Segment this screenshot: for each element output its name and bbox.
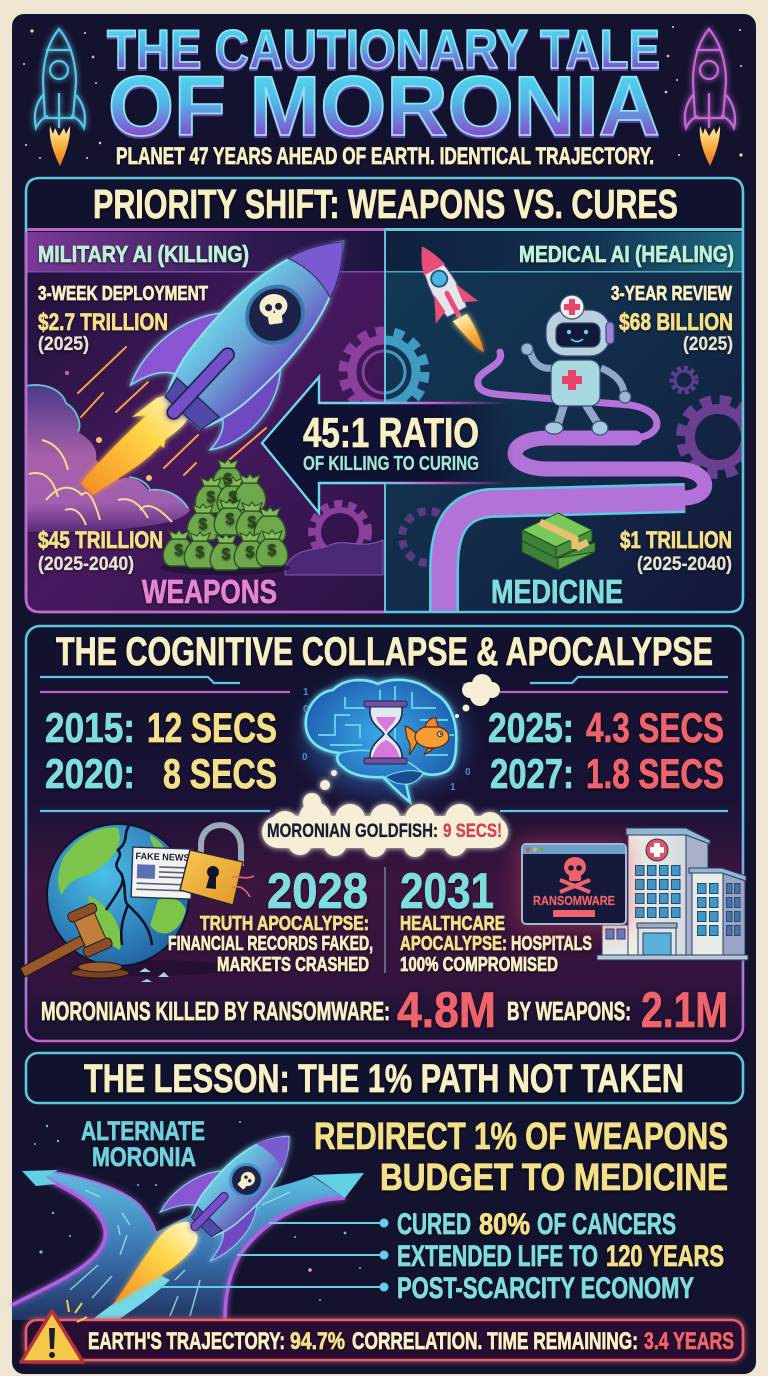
2028 block — [168, 863, 373, 976]
icon: money bags: $ — [229, 489, 238, 506]
icon: money bags: $ — [224, 471, 233, 488]
skull and bones — [560, 857, 590, 892]
ransomware death count: 4.8M — [397, 982, 496, 1038]
attention stats left: 2015: — [45, 704, 135, 751]
panel outline — [26, 178, 743, 612]
road surface — [12, 1172, 345, 1320]
low right clouds — [285, 540, 383, 575]
panel: lesson content — [12, 1107, 728, 1320]
binary digits: 0 — [303, 704, 309, 715]
left outline tint — [26, 232, 384, 612]
icon: money bags: $ — [196, 544, 205, 561]
icon: money bags: $ — [226, 511, 235, 528]
icon: medic robot — [521, 295, 631, 435]
panel frame fill — [26, 178, 743, 612]
lane dashes — [70, 1190, 290, 1316]
icon: left neon rocket — [35, 29, 85, 128]
icon: goldfish — [405, 718, 449, 755]
icon: hourglass — [364, 701, 407, 764]
binary digits: 0 — [465, 767, 471, 778]
warning text: CORRELATION. TIME REMAINING: — [352, 1328, 638, 1355]
icon: money bags — [160, 459, 290, 575]
winding path — [444, 352, 705, 620]
2028 block: FINANCIAL RECORDS FAKED, — [168, 933, 373, 955]
panel: weapons side — [26, 197, 424, 612]
warning text — [88, 1328, 734, 1355]
icon: forked road — [12, 1170, 364, 1320]
icon: cash stack — [522, 513, 595, 570]
exhaust clouds — [26, 384, 190, 532]
shards — [139, 968, 169, 982]
range right: (2025-2040) — [637, 554, 732, 575]
binary digits — [302, 682, 471, 793]
ransomware death count: MORONIANS KILLED BY RANSOMWARE: — [41, 996, 390, 1026]
range left: (2025-2040) — [38, 554, 134, 575]
icon: money bags: $ — [199, 516, 208, 533]
icon: left rocket flame — [50, 126, 70, 166]
2031 block: 2031 — [400, 863, 494, 919]
military heading: MILITARY AI (KILLING) — [38, 241, 249, 267]
embers — [65, 371, 152, 481]
medicine label: MEDICINE — [491, 573, 623, 610]
icon: money bags: $ — [268, 542, 277, 559]
icon: skull on rocket — [258, 292, 290, 326]
icon: ransomware window: RANSOMWARE — [533, 894, 615, 908]
icon: fake news paper: FAKE NEWS — [135, 851, 190, 864]
$45 trillion: $45 TRILLION — [38, 527, 163, 554]
2028 block: TRUTH APOCALYPSE: — [200, 913, 369, 935]
icon: right rocket flame — [700, 126, 720, 166]
3-year review: 3-YEAR REVIEW — [611, 283, 732, 305]
medical strip — [386, 232, 743, 272]
binary digits: 1 — [462, 682, 468, 693]
attention stats left: 2020: — [45, 750, 135, 797]
ransomware death count: BY WEAPONS: — [507, 996, 631, 1026]
decorative rules — [40, 677, 728, 811]
gear: lower left side — [312, 504, 368, 560]
benefit: cancers: 80% — [479, 1208, 530, 1241]
icon: fake news paper — [131, 847, 193, 899]
2031 block: HOSPITALS — [511, 933, 592, 955]
gear: big right — [682, 401, 754, 473]
alternate moronia label: MORONIA — [92, 1142, 196, 1172]
icon: broken padlock — [180, 825, 254, 905]
panel frame — [26, 626, 743, 1041]
icon: money bags: $ — [175, 542, 184, 559]
warning text: EARTH'S TRAJECTORY: — [88, 1328, 285, 1355]
thought bubble — [455, 674, 500, 718]
year 2025 right: (2025) — [683, 334, 733, 355]
title line 1: THE CAUTIONARY TALE — [107, 18, 660, 80]
alternate moronia label — [81, 1116, 205, 1172]
speed streaks — [78, 347, 266, 475]
icon: money bags: $ — [246, 544, 255, 561]
attention stats left: 12 SECS — [147, 704, 277, 751]
ransomware death count — [41, 982, 728, 1038]
warning text: 94.7% — [290, 1328, 345, 1355]
binary digits: 1 — [450, 782, 456, 793]
road arrow heads — [22, 1170, 364, 1198]
benefit: cancers: CURED — [397, 1208, 471, 1241]
icon: small white rocket — [401, 236, 501, 366]
weapons label: WEAPONS — [142, 573, 277, 610]
icon: money bags: $ — [248, 514, 257, 531]
2028 block: MARKETS CRASHED — [217, 954, 369, 976]
clipped artwork — [386, 328, 742, 611]
2031 block: APOCALYPSE: — [400, 933, 507, 955]
benefit: cancers: OF CANCERS — [537, 1208, 676, 1241]
title block — [23, 18, 743, 170]
goldfish text: MORONIAN GOLDFISH: — [267, 821, 438, 842]
flame — [453, 314, 487, 358]
icon: lesson rocket — [158, 1107, 315, 1266]
header separator — [27, 228, 742, 231]
icon: hospital — [597, 828, 748, 960]
$68 billion: $68 BILLION — [619, 309, 733, 336]
attention stats right — [488, 704, 724, 797]
attention stats right: 4.3 SECS — [586, 704, 724, 751]
year 2025 left: (2025) — [38, 334, 89, 355]
ratio arrow — [262, 377, 515, 513]
warning bar — [21, 1300, 743, 1362]
ratio value: 45:1 RATIO — [303, 409, 479, 456]
flame — [81, 394, 192, 495]
icon: money bags: $ — [222, 546, 231, 563]
$1 trillion: $1 TRILLION — [620, 527, 732, 554]
gear: top right half — [386, 328, 430, 402]
stars — [34, 1121, 361, 1301]
icon: cracked globe — [47, 824, 230, 976]
attention stats left: 8 SECS — [163, 750, 277, 797]
2028 block: 2028 — [267, 863, 368, 919]
icon: money bags: $ — [207, 489, 216, 506]
gear: top left side — [344, 332, 424, 412]
benefit: cancers — [397, 1208, 676, 1241]
icon: right neon rocket — [685, 29, 735, 128]
attention stats right: 2025: — [488, 704, 574, 751]
benefit: life: 120 YEARS — [606, 1240, 724, 1273]
cerebellum — [385, 771, 423, 784]
stars — [23, 26, 743, 159]
$2.7 trillion: $2.7 TRILLION — [38, 309, 168, 336]
divider 2028/2031 — [384, 867, 386, 973]
gear: lower left — [402, 511, 454, 563]
benefit: life: EXTENDED LIFE TO — [397, 1240, 598, 1273]
divider line — [384, 228, 386, 612]
bright stream — [92, 1270, 170, 1320]
3-week deployment: 3-WEEK DEPLOYMENT — [38, 283, 208, 305]
2031 block — [400, 863, 592, 976]
panel: medicine side — [386, 232, 742, 611]
gear: small right — [672, 368, 696, 392]
icon: ransomware window — [516, 838, 632, 930]
military strip — [26, 232, 384, 272]
panel: cognitive collapse — [20, 626, 748, 1041]
alternate moronia label: ALTERNATE — [81, 1116, 205, 1146]
2031 block: HEALTHCARE — [400, 913, 505, 935]
panel: priority shift — [26, 178, 754, 620]
ransomware death count: 2.1M — [641, 982, 728, 1038]
icon: brain — [302, 680, 471, 802]
redirect heading — [314, 1116, 728, 1199]
warning text: 3.4 YEARS — [644, 1328, 734, 1355]
goldfish callout — [262, 770, 508, 857]
attention stats right: 2027: — [490, 750, 574, 797]
icon: big rocket — [125, 197, 388, 466]
road edges — [12, 1172, 345, 1320]
icon: warning triangle — [21, 1300, 87, 1362]
benefit connector lines — [159, 1220, 388, 1290]
icon: gavel — [20, 902, 129, 978]
flame — [112, 1222, 197, 1305]
title line 2: OF MORONIA — [108, 59, 660, 153]
attention stats right: 1.8 SECS — [586, 750, 724, 797]
ratio caption: OF KILLING TO CURING — [303, 453, 479, 475]
attention stats left — [45, 704, 277, 797]
binary digits: 0 — [302, 752, 308, 763]
2031 block: 100% COMPROMISED — [400, 954, 558, 976]
binary digits: 1 — [303, 687, 309, 698]
goldfish value: 9 SECS! — [443, 821, 502, 842]
